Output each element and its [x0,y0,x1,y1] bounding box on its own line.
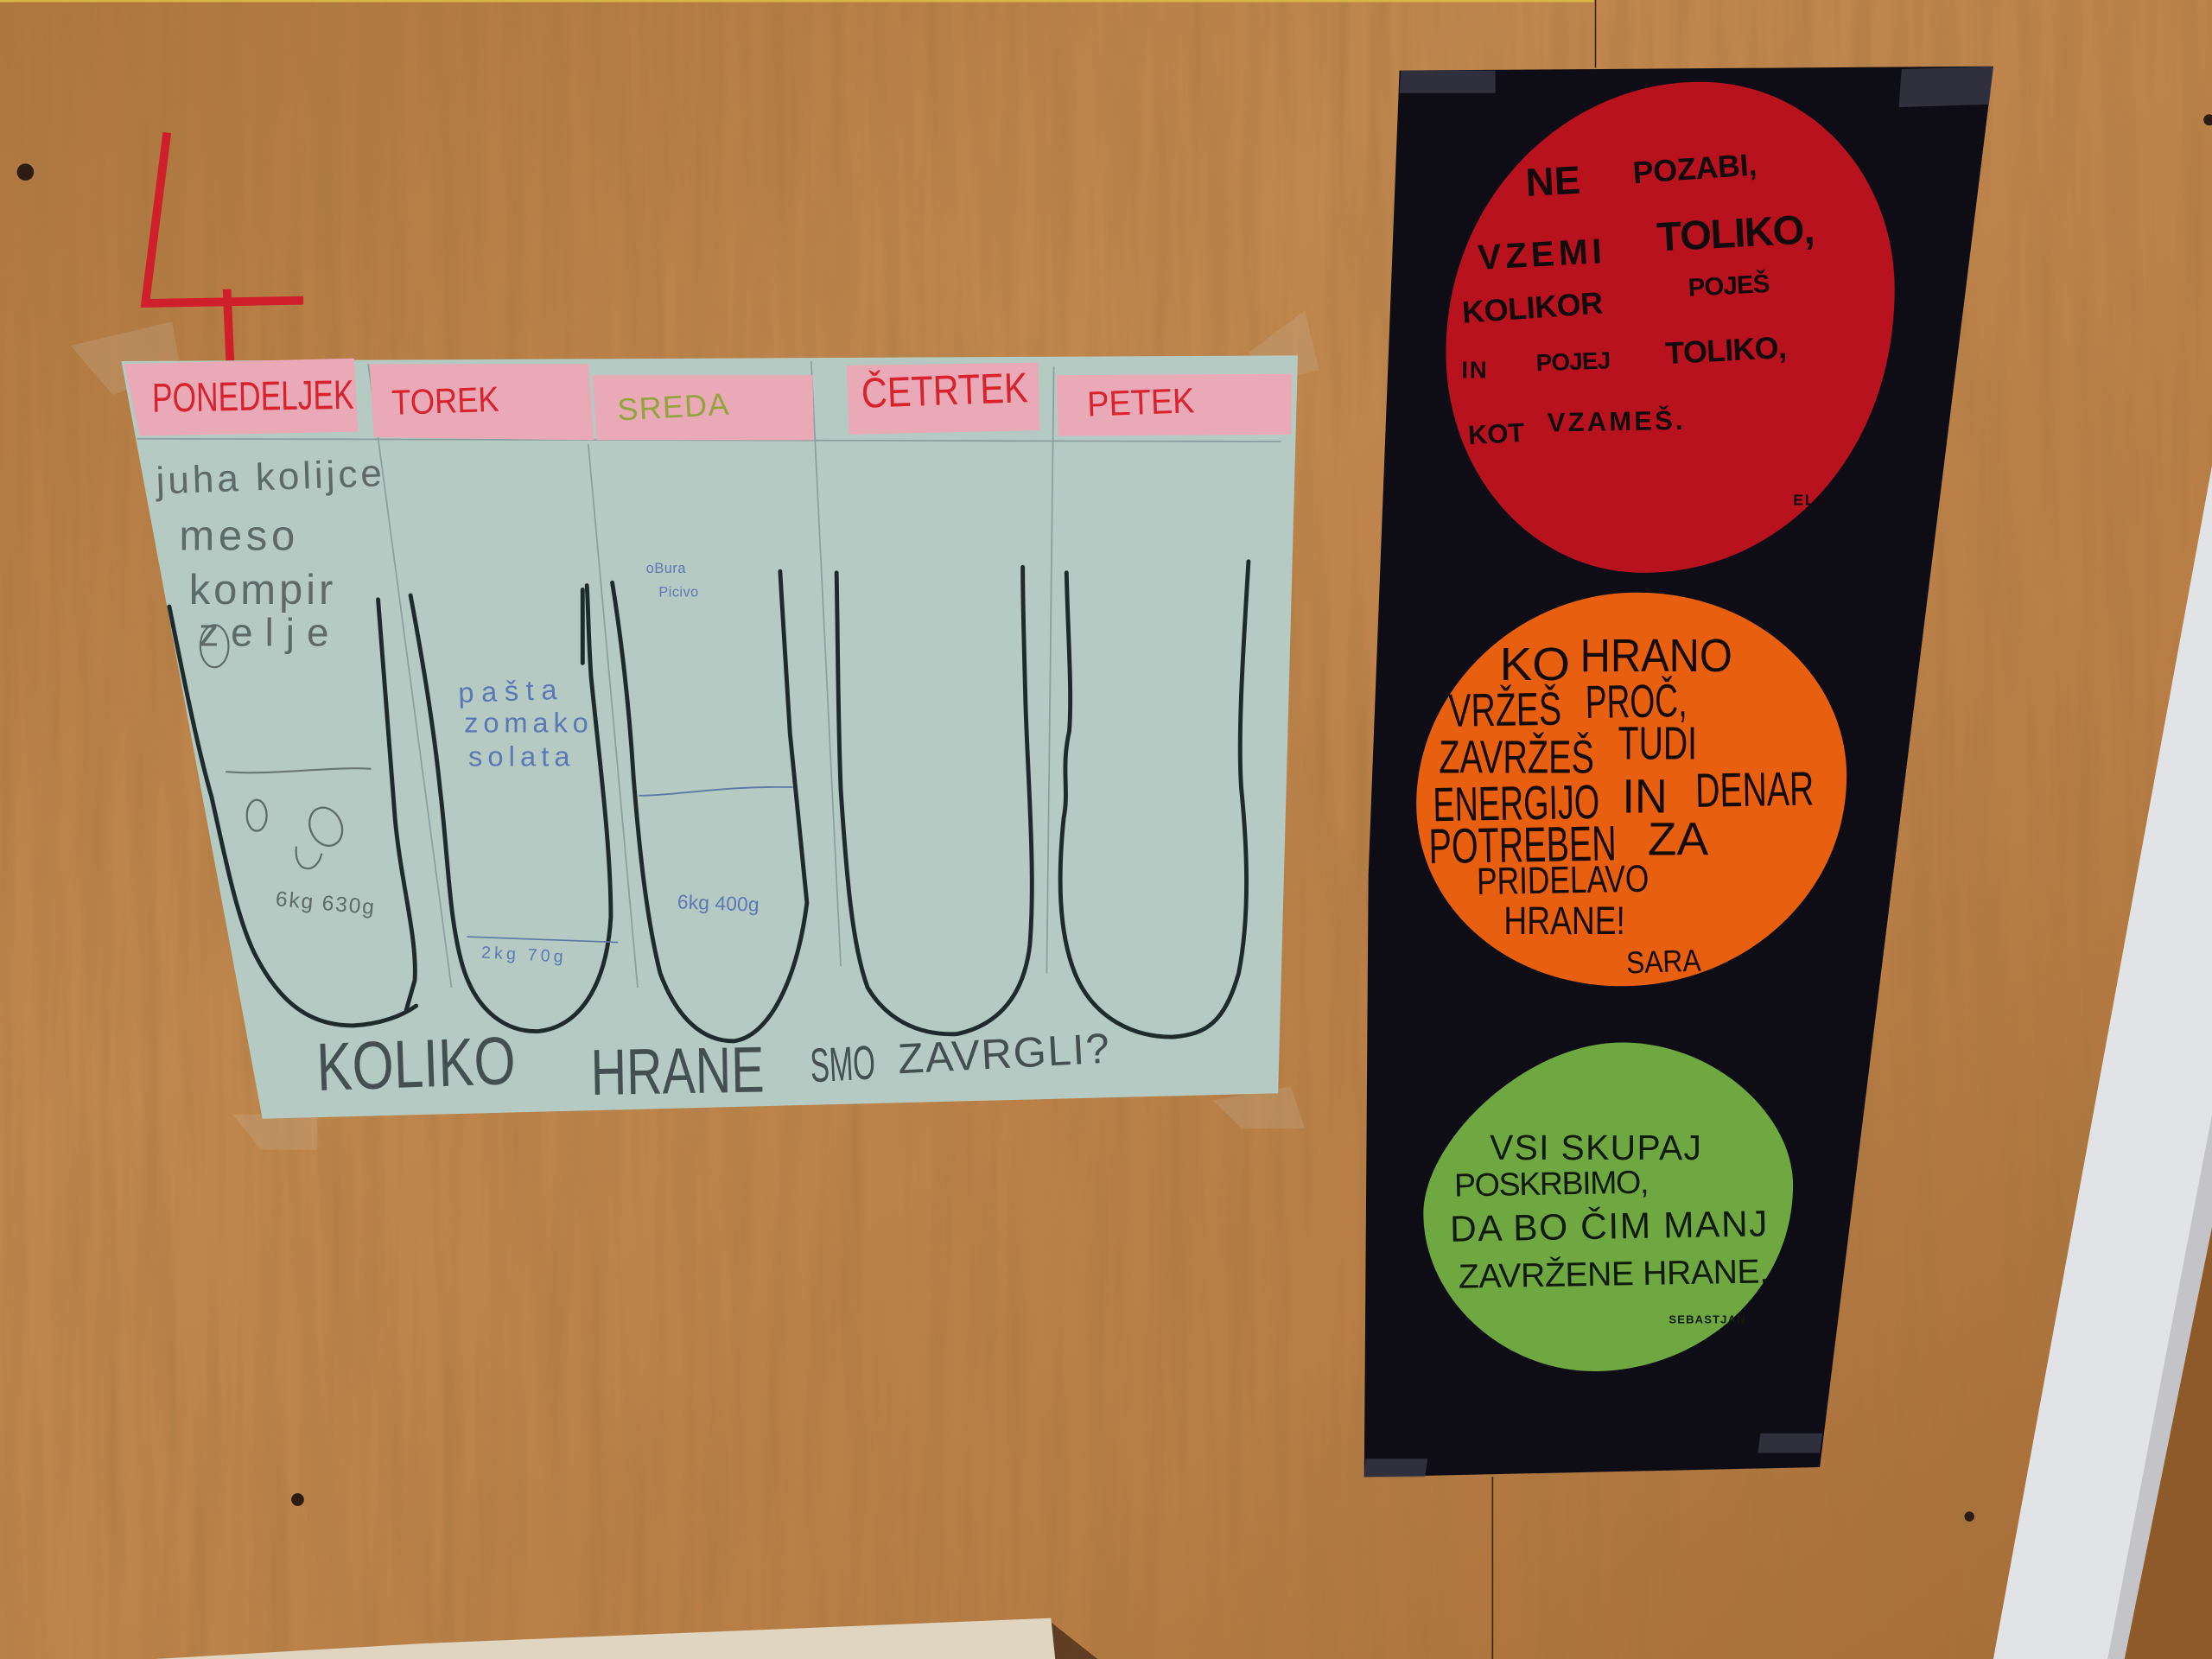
orange light: TUDI [1618,717,1697,769]
green light: POSKRBIMO, [1454,1164,1649,1203]
tuesday menu and level: pašta [458,673,558,709]
monday menu text: kompir [189,567,333,613]
monday menu text: zelje [199,611,328,655]
red light: POJEŠ [1688,269,1770,302]
red light: TOLIKO, [1664,329,1788,371]
green light [1423,1043,1793,1371]
black backing [1364,67,1993,1477]
paper sheet [121,355,1298,1119]
green light: DA BO ČIM MANJ [1450,1203,1768,1249]
monday fill level and face [200,625,375,919]
orange light: PROČ, [1585,675,1688,728]
orange light: HRANO [1580,630,1732,682]
poster: traffic light [1364,67,1993,1477]
wednesday menu and level [639,561,793,916]
monday menu text: meso [179,513,295,560]
number 4 drawn in red [145,137,299,359]
tuesday tube [410,586,611,1032]
day header: sreda [593,375,814,440]
red light: TOLIKO, [1656,207,1816,261]
day header: ponedeljek [124,359,359,435]
poster question: KOLIKO [315,1022,517,1105]
column grid lines [137,361,1281,988]
red light: NE [1524,158,1581,205]
tuesday menu and level [458,673,618,967]
orange light: DENAR [1695,761,1815,817]
orange light: ENERGIJO [1433,775,1600,831]
poster question: SMO [809,1035,876,1092]
green light: ZAVRŽENE HRANE. [1459,1253,1769,1296]
red light: POJEJ [1535,346,1611,376]
tuesday menu and level: 2kg 70g [480,944,563,967]
red light: IN [1461,357,1487,384]
monday fill level and face: 6kg 630g [275,887,375,919]
orange light: VRŽEŠ [1448,683,1562,737]
red light: KOT [1467,417,1525,450]
tuesday menu and level: zomako [464,706,588,738]
day header: cetrtek [847,363,1039,435]
green light: SEBASTJAN [1669,1313,1745,1325]
wednesday menu and level: 6kg 400g [677,890,760,916]
orange light: ZAVRŽEŠ [1439,732,1594,784]
red light: KOLIKOR [1461,285,1605,330]
wednesday menu and level: oBura [646,561,686,576]
red light: POZABI, [1631,146,1758,190]
wednesday tube [613,571,807,1041]
wednesday menu and level: Picivo [658,585,698,601]
monday tube [169,600,416,1026]
tuesday menu and level: solata [468,741,570,772]
orange light [1416,593,1847,986]
day header: torek: TOREK [391,379,499,423]
day header: sreda: SREDA [616,386,729,428]
red light: VZEMI [1477,231,1603,277]
orange light: POTREBEN [1428,816,1617,874]
thursday tube [836,567,1032,1034]
orange light: ZA [1648,813,1708,865]
door frame [1993,466,2212,1659]
monday menu text: juha kolijce [154,452,383,502]
orange light: KO [1500,639,1570,690]
friday tube [1060,562,1249,1037]
poster question: ZAVRGLI? [897,1026,1110,1083]
day header: petek [1057,374,1293,435]
beige object at bottom edge [156,1618,1097,1659]
day header: ponedeljek: PONEDELJEK [152,372,354,422]
orange light: PRIDELAVO [1477,858,1649,903]
poster question: HRANE [590,1033,765,1109]
day header: cetrtek: ČETRTEK [861,365,1029,417]
tape on traffic light [1364,67,1993,1477]
day header: petek: PETEK [1086,380,1195,424]
red light: VZAMEŠ. [1548,404,1683,438]
green light: VSI SKUPAJ [1490,1128,1701,1167]
poster question [315,1022,1110,1109]
orange light: IN [1623,769,1668,823]
red light: ELA [1793,491,1827,508]
poster: Koliko hrane smo zavrgli [121,355,1298,1119]
tape pieces [71,310,1319,1150]
red light [1446,82,1895,573]
orange light: HRANE! [1503,899,1625,943]
monday menu text [154,452,383,655]
day header: torek [370,364,594,440]
orange light: SARA [1625,943,1701,981]
